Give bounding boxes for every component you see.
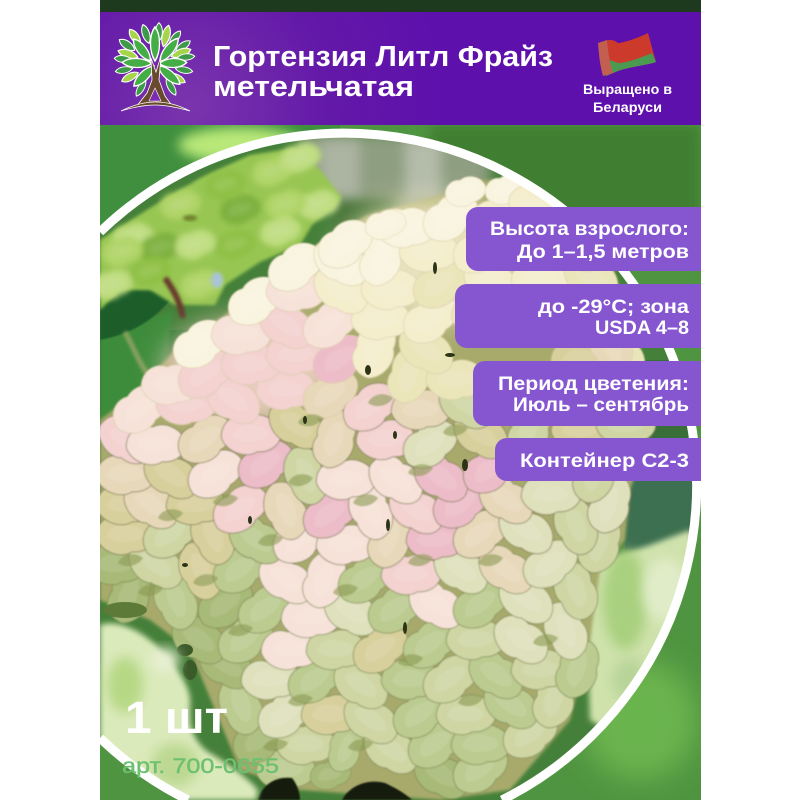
badge: hardiness bbox=[455, 284, 701, 348]
trunk bbox=[136, 56, 173, 107]
bokeh green bloom right bbox=[585, 527, 690, 727]
bokeh pale bloom bottom-left bbox=[100, 623, 258, 800]
background leaves and stem bbox=[100, 286, 190, 420]
petals: lower green zone bbox=[86, 509, 629, 800]
badge: height bbox=[466, 207, 701, 271]
background green bloom top-left bbox=[89, 139, 342, 318]
hydrangea bloom bbox=[86, 171, 656, 800]
white circular ring bbox=[100, 133, 697, 800]
header band bbox=[100, 12, 701, 125]
circular photo: hydrangea bbox=[86, 130, 701, 800]
badge: bloom period: Период цветения: bbox=[498, 374, 689, 395]
origin label: Беларуси bbox=[593, 100, 662, 115]
title: Гортензия Литл Фрайз bbox=[213, 41, 553, 73]
origin label bbox=[583, 82, 672, 115]
badge: container bbox=[495, 438, 701, 481]
badge: bloom period bbox=[473, 361, 701, 426]
badge: hardiness: до -29°С; зона bbox=[538, 297, 689, 318]
title: метельчатая bbox=[213, 71, 414, 103]
origin label: Выращено в bbox=[583, 82, 672, 97]
green folds between petals bbox=[118, 394, 558, 751]
top photo strip bbox=[100, 0, 701, 12]
photo background bbox=[86, 0, 701, 800]
badge: container: Контейнер С2-3 bbox=[520, 451, 689, 472]
petal shadows bbox=[103, 262, 468, 680]
badge: hardiness: USDA 4–8 bbox=[595, 318, 689, 339]
petals: top pink and cream zone bbox=[105, 171, 651, 443]
badge: height: До 1–1,5 метров bbox=[517, 242, 689, 263]
ground bbox=[121, 102, 190, 111]
quantity: 1 шт bbox=[125, 692, 228, 743]
badge: bloom period: Июль – сентябрь bbox=[513, 395, 689, 416]
petals: central pink zone bbox=[90, 372, 656, 574]
leaves bbox=[114, 23, 195, 98]
title bbox=[213, 41, 553, 103]
dark gaps under bloom bbox=[258, 778, 412, 800]
logo: tree bbox=[114, 23, 195, 111]
flag of Belarus bbox=[598, 33, 656, 76]
article number: арт. 700-0655 bbox=[122, 755, 279, 778]
badge: height: Высота взрослого: bbox=[490, 219, 689, 240]
